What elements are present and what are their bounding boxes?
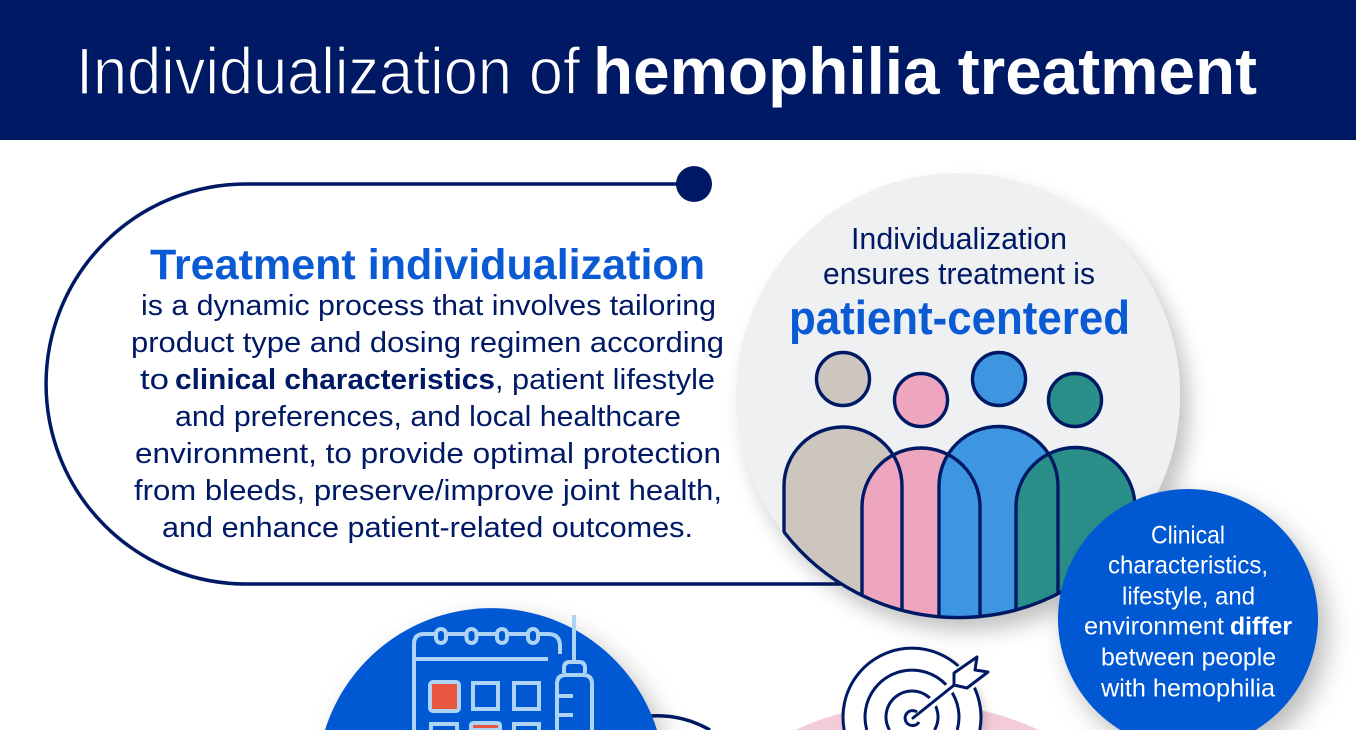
title (76, 34, 1257, 108)
panel: treatment goals pink circle (795, 703, 1039, 730)
icon: target with arrow (843, 648, 988, 730)
callout: differences between people: with hemophilia (1100, 674, 1275, 702)
callout: differences between people: Clinical (1151, 522, 1225, 550)
callout: differences between people (1058, 489, 1318, 730)
text block: patient-centered statement (789, 221, 1130, 344)
title: Individualization of (76, 34, 581, 108)
text block: treatment individualization definition: from bleeds, preserve/improve joint health, (134, 475, 722, 507)
callout: differences between people: between people (1101, 644, 1276, 672)
text block: treatment individualization definition (131, 241, 724, 544)
text block: treatment individualization definition: to (140, 364, 169, 396)
callout: differences between people: differ (1230, 612, 1292, 640)
text block: treatment individualization definition: clinical characteristics (175, 364, 495, 396)
title: hemophilia treatment (593, 34, 1257, 108)
panel: patient-centered circle (736, 173, 1180, 660)
callout: differences between people: environment (1084, 612, 1224, 640)
callout: differences between people: characteristics, (1108, 552, 1268, 580)
text block: patient-centered statement: patient-centered (789, 291, 1130, 344)
icon: group of four people (782, 350, 1136, 620)
text block: treatment individualization definition: is a dynamic process that involves tailoring (141, 290, 716, 322)
icon: calendar and syringe (412, 615, 592, 730)
text block: treatment individualization definition: Treatment individualization (150, 241, 705, 289)
text block: treatment individualization definition: environment, to provide optimal protection (135, 438, 721, 470)
text block: treatment individualization definition: , patient lifestyle (495, 364, 715, 396)
text block: treatment individualization definition: and preferences, and local healthcare (175, 401, 681, 433)
panel: dosing circle (325, 608, 657, 730)
callout: differences between people: lifestyle, and (1122, 582, 1255, 610)
text block: treatment individualization definition: product type and dosing regimen according (131, 327, 724, 359)
panel: definition outline with end dot (46, 166, 860, 584)
text block: treatment individualization definition: and enhance patient-related outcomes. (162, 512, 693, 544)
header banner (0, 0, 1356, 140)
text block: patient-centered statement: ensures treatment is (823, 256, 1095, 291)
arc: outline of lower panel (650, 716, 710, 730)
text block: patient-centered statement: Individualization (851, 221, 1067, 256)
